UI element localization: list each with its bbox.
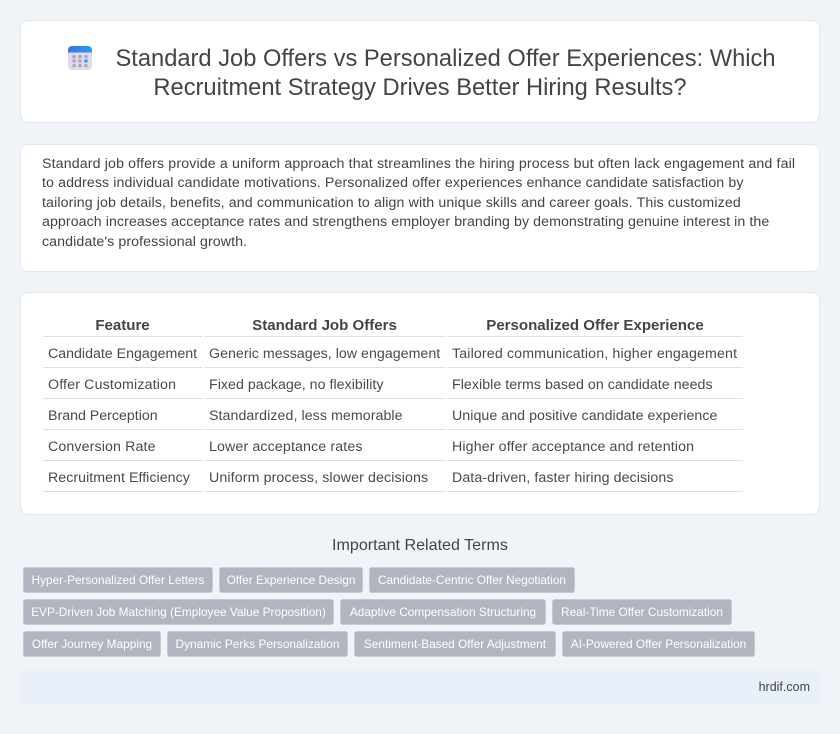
intro panel — [20, 144, 820, 272]
footer source text: hrdif.com — [759, 680, 810, 694]
comparison table: Personalized Offer Experience — [486, 317, 704, 334]
table panel — [20, 292, 820, 515]
intro text: to address individual candidate motivations. Personalized offer experiences enhance candidate satisfaction by — [42, 175, 744, 191]
related term tags: AI-Powered Offer Personalization — [571, 637, 746, 651]
comparison table: Offer Customization — [48, 377, 176, 393]
intro text — [42, 156, 795, 250]
footer bar — [20, 670, 820, 704]
comparison table: Standardized, less memorable — [209, 408, 403, 424]
related term tags: Offer Journey Mapping — [32, 637, 152, 651]
comparison table: Fixed package, no flexibility — [209, 377, 384, 393]
comparison table: Lower acceptance rates — [209, 439, 363, 455]
comparison table: Flexible terms based on candidate needs — [452, 377, 713, 393]
icon: calendar — [68, 46, 92, 70]
related term tags: Offer Experience Design — [227, 573, 355, 587]
related term tags: Sentiment-Based Offer Adjustment — [364, 637, 546, 651]
comparison table: Uniform process, slower decisions — [209, 470, 428, 486]
comparison table: Candidate Engagement — [48, 346, 197, 362]
related term tags: Hyper-Personalized Offer Letters — [32, 573, 204, 587]
related term tags: Real-Time Offer Customization — [561, 605, 723, 619]
comparison table: Standard Job Offers — [252, 317, 397, 334]
comparison table: Tailored communication, higher engagement — [452, 346, 737, 362]
title: Recruitment Strategy Drives Better Hiring Results? — [153, 75, 687, 101]
intro text: tailoring job details, benefits, and communication to align with unique skills and career goals. This customized — [42, 195, 741, 211]
comparison table: Unique and positive candidate experience — [452, 408, 717, 424]
intro text: approach increases acceptance rates and strengthens employer branding by demonstrating genuine interest in the — [42, 214, 769, 230]
comparison table: Recruitment Efficiency — [48, 470, 190, 486]
comparison table: Conversion Rate — [48, 439, 156, 455]
comparison table: Brand Perception — [48, 408, 158, 424]
comparison table: Feature — [95, 317, 150, 334]
comparison table: Data-driven, faster hiring decisions — [452, 470, 674, 486]
related term tags: EVP-Driven Job Matching (Employee Value Proposition) — [31, 605, 326, 619]
header panel — [20, 20, 820, 123]
title — [115, 46, 776, 101]
related term tags: Dynamic Perks Personalization — [176, 637, 339, 651]
comparison table: Generic messages, low engagement — [209, 346, 440, 362]
comparison table: Higher offer acceptance and retention — [452, 439, 694, 455]
title: Standard Job Offers vs Personalized Offer Experiences: Which — [115, 46, 776, 72]
intro text: candidate's professional growth. — [42, 234, 247, 250]
related term tags — [23, 567, 755, 657]
intro text: Standard job offers provide a uniform approach that streamlines the hiring process but often lack engagement and fail — [42, 156, 795, 172]
related term tags: Adaptive Compensation Structuring — [350, 605, 536, 619]
comparison table — [43, 317, 743, 492]
related terms heading: Important Related Terms — [332, 536, 508, 554]
related term tags: Candidate-Centric Offer Negotiation — [378, 573, 566, 587]
